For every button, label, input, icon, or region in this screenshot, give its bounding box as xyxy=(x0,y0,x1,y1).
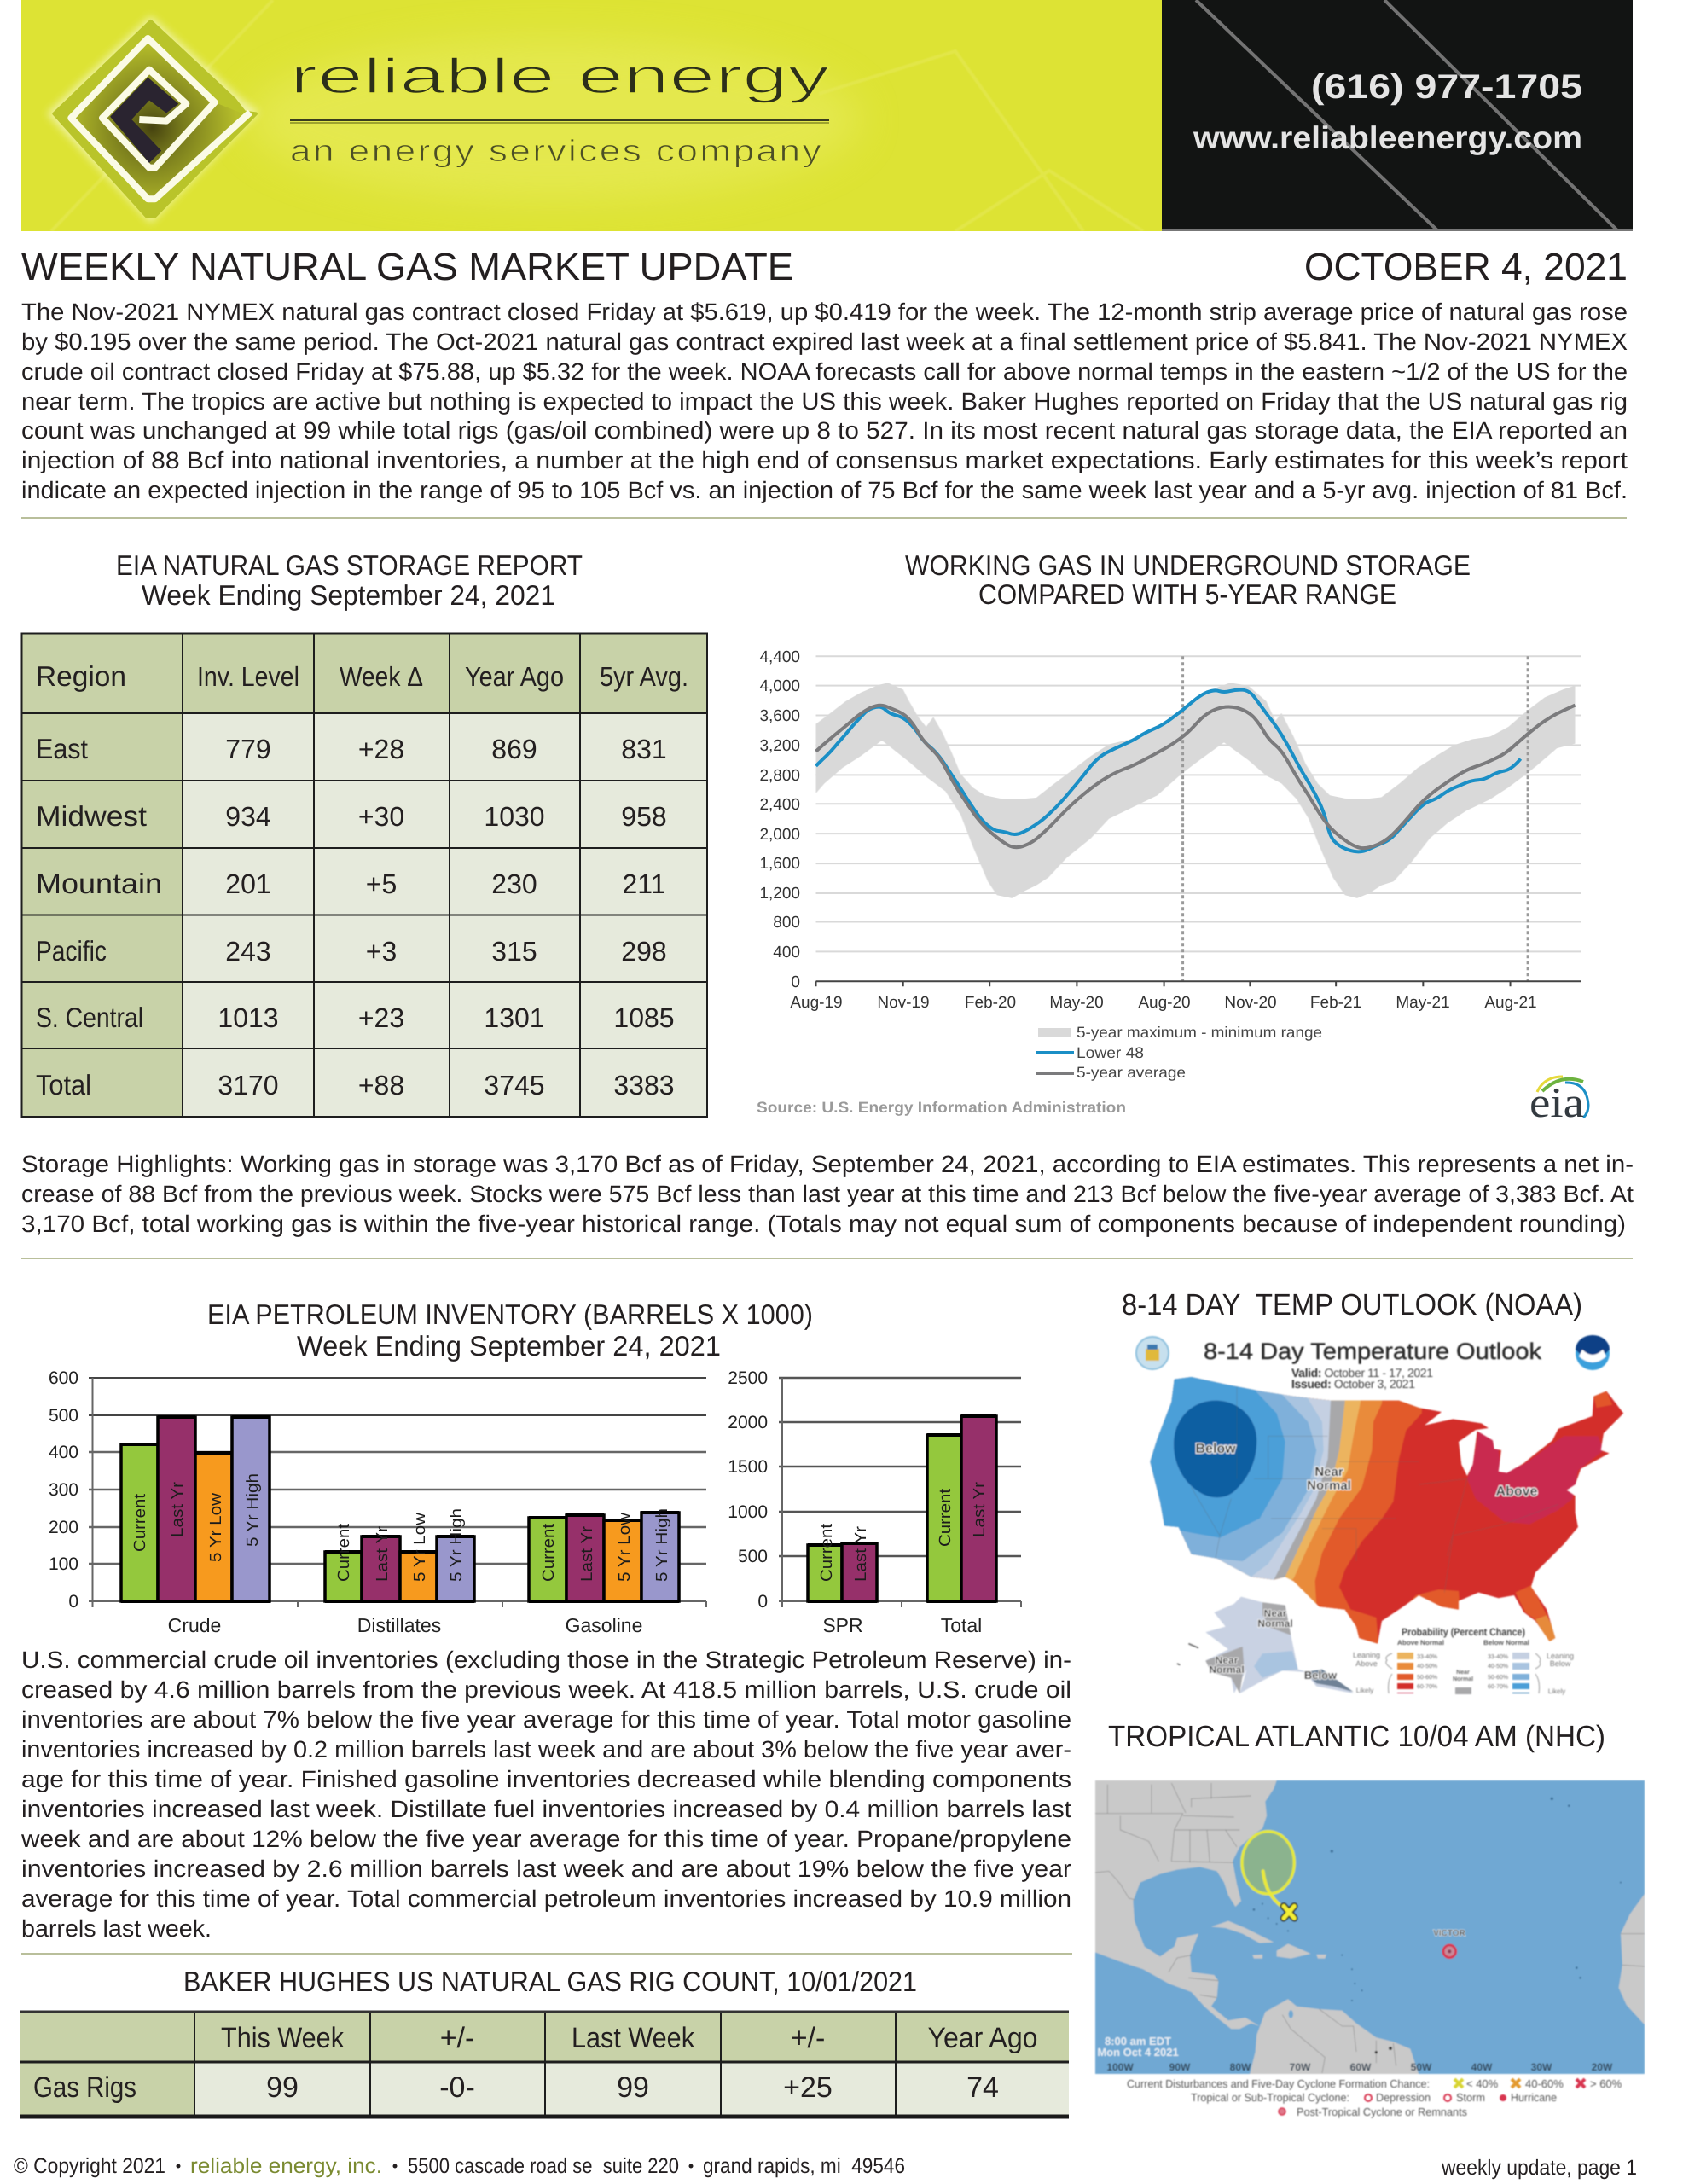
y axis labels: 2000 xyxy=(728,1413,768,1432)
chart legend: 5-year average xyxy=(1077,1064,1186,1081)
row: East: 869 xyxy=(491,734,537,764)
footer: copyright and address: reliable energy, inc. xyxy=(190,2154,382,2178)
heading: working gas chart: WORKING GAS IN UNDERGROUND STORAGE xyxy=(905,549,1471,581)
bars: total: Last Yr xyxy=(971,1481,989,1537)
bars: total: Current xyxy=(937,1488,955,1547)
row: Pacific xyxy=(36,935,667,967)
timestamp: 8:00 am EDT xyxy=(1105,2035,1171,2048)
map legend: Above xyxy=(1355,1659,1378,1668)
y axis labels: 0 xyxy=(757,1592,768,1612)
map legend: 60-70% xyxy=(1488,1684,1508,1690)
map legend xyxy=(1127,2077,1622,2118)
x axis labels xyxy=(790,994,1537,1012)
bars: gasoline: Last Yr xyxy=(578,1525,596,1582)
row: S. Central: 1013 xyxy=(218,1002,279,1033)
y axis labels: 600 xyxy=(49,1368,78,1388)
timestamp xyxy=(1097,2035,1179,2059)
map legend: 33-40% xyxy=(1488,1654,1508,1660)
y axis labels: 500 xyxy=(738,1547,768,1566)
alaska xyxy=(1205,1597,1354,1693)
row: S. Central xyxy=(36,1002,675,1033)
footer: copyright and address: © Copyright 2021 xyxy=(14,2154,165,2178)
text block: market summary xyxy=(21,299,1628,503)
text block: market summary: by $0.195 over the same period. The Oct-2021 natural gas contract expired last week at a final settlement price of $5.841. The Nov-2021 NYMEX xyxy=(21,328,1628,355)
category labels: Distillates xyxy=(357,1614,441,1636)
x axis labels: Feb-20 xyxy=(965,994,1016,1012)
map: NOAA 8-14 day temperature outlook xyxy=(1135,1334,1624,1696)
tagline: an energy services company xyxy=(290,133,823,168)
y axis labels xyxy=(728,1368,768,1612)
bars: SPR: Last Yr xyxy=(852,1525,870,1582)
y axis labels: 3,200 xyxy=(759,737,800,755)
text block: petroleum commentary: inventories are about 7% below the five year average for this time of year. Total motor gasoline xyxy=(21,1706,1071,1733)
icon: commerce seal xyxy=(1136,1337,1169,1369)
map legend: Below Normal xyxy=(1483,1639,1529,1647)
text block: market summary: count was unchanged at 99 while total rigs (gas/oil combined) were up 8 to 527. In its most recent natural gas storage data, the EIA reported an xyxy=(21,417,1628,444)
text block: petroleum commentary: creased by 4.6 million barrels from the previous week. At 418.5 million barrels, U.S. crude oil xyxy=(21,1676,1071,1703)
y axis labels: 400 xyxy=(49,1443,78,1462)
y axis labels xyxy=(49,1368,78,1612)
category labels xyxy=(822,1614,982,1636)
map region labels: Normal xyxy=(1307,1478,1351,1493)
category labels: Total xyxy=(941,1614,982,1636)
map legend: 50-60% xyxy=(1417,1675,1437,1681)
line chart: working gas in underground storage xyxy=(757,648,1588,1126)
row: Midwest: 1030 xyxy=(484,801,545,832)
y axis labels: 500 xyxy=(49,1406,78,1426)
y axis labels: 3,600 xyxy=(759,707,800,725)
chart legend xyxy=(1036,1024,1322,1081)
heading: tropical atlantic: TROPICAL ATLANTIC 10/04 AM (NHC) xyxy=(1108,1720,1605,1753)
map region labels: Above xyxy=(1496,1484,1538,1499)
row: Pacific: Pacific xyxy=(36,935,107,967)
disturbance formation area xyxy=(1242,1832,1294,1894)
longitude labels: 50W xyxy=(1411,2061,1432,2073)
y axis labels: 1,200 xyxy=(759,885,800,903)
chart legend: Lower 48 xyxy=(1077,1044,1144,1061)
row: Total xyxy=(36,1069,675,1101)
map legend: 40-60% xyxy=(1525,2077,1564,2090)
map legend: Storm xyxy=(1456,2091,1485,2104)
row: East: 779 xyxy=(225,734,271,764)
map legend: Tropical or Sub-Tropical Cyclone: xyxy=(1191,2091,1349,2104)
rig table data row: +25 xyxy=(783,2071,833,2104)
map shapes xyxy=(1095,1780,1645,2075)
arrow: disturbance track xyxy=(1263,1871,1282,1907)
row: S. Central: S. Central xyxy=(36,1002,143,1033)
longitude labels: 100W xyxy=(1106,2061,1134,2073)
chart legend: 5-year maximum - minimum range xyxy=(1077,1024,1322,1041)
row: Midwest: 958 xyxy=(621,801,667,832)
panel: yellow logo band xyxy=(21,0,1162,231)
row: Pacific: 315 xyxy=(491,936,537,967)
rig table data row: -0- xyxy=(439,2071,475,2104)
rig table header row: Last Week xyxy=(572,2022,695,2054)
row: Mountain: 211 xyxy=(622,868,666,899)
text block: market summary: The Nov-2021 NYMEX natural gas contract closed Friday at $5.619, up $0.419 for the week. The 12-month strip average price of natural gas rose xyxy=(21,299,1628,325)
map title: 8-14 Day Temperature Outlook xyxy=(1204,1339,1542,1364)
footer: copyright and address xyxy=(14,2154,905,2178)
x axis labels: Feb-21 xyxy=(1310,994,1361,1012)
rig table header row: This Week xyxy=(221,2022,345,2054)
bars: SPR xyxy=(808,1523,877,1601)
map legend: Probability (Percent Chance) xyxy=(1402,1626,1525,1638)
y axis labels: 0 xyxy=(68,1592,78,1612)
text block: petroleum commentary: average for this time of year. Total commercial petroleum inventories increased by 10.9 million xyxy=(21,1885,1071,1912)
table header row: 5yr Avg. xyxy=(600,661,688,692)
bar chart: crude, distillates, gasoline xyxy=(49,1368,706,1636)
row: Total: 3170 xyxy=(218,1070,279,1101)
header banner xyxy=(21,0,1633,231)
map region labels xyxy=(1195,1442,1538,1682)
map legend: 50-60% xyxy=(1488,1675,1508,1681)
bars: gasoline xyxy=(529,1508,679,1601)
row: Midwest xyxy=(36,800,667,832)
y axis labels xyxy=(759,648,800,991)
x axis labels: Aug-21 xyxy=(1484,994,1537,1012)
map legend: 60-70% xyxy=(1417,1684,1437,1690)
text block: petroleum commentary: age for this time of year. Finished gasoline inventories decreased while blending components xyxy=(21,1766,1071,1792)
map legend xyxy=(1353,1626,1574,1695)
text block: petroleum commentary: inventories increased by 0.2 million barrels last week and are about 3% below the five year aver- xyxy=(21,1736,1071,1763)
heading: petroleum inventory xyxy=(207,1298,813,1362)
row: Mountain: 201 xyxy=(225,868,271,899)
rig table data row: 74 xyxy=(966,2071,999,2104)
y axis labels: 4,000 xyxy=(759,677,800,695)
bars: distillates: Current xyxy=(335,1523,353,1582)
map legend: Leaning xyxy=(1547,1652,1574,1660)
map legend: Likely xyxy=(1356,1687,1373,1694)
map legend: Likely xyxy=(1548,1687,1565,1695)
bars: gasoline: 5 Yr Low xyxy=(616,1513,634,1582)
heading: rig count: BAKER HUGHES US NATURAL GAS RIG COUNT, 10/01/2021 xyxy=(183,1966,917,1997)
chart plot lines xyxy=(816,656,1581,986)
map: NHC tropical atlantic outlook xyxy=(1095,1780,1645,2118)
row: Mountain xyxy=(36,868,666,899)
row: Pacific: 298 xyxy=(621,936,667,967)
heading: petroleum inventory: Week Ending September 24, 2021 xyxy=(297,1330,721,1362)
text block: petroleum commentary: U.S. commercial crude oil inventories (excluding those in the Strategic Petroleum Reserve) in- xyxy=(21,1647,1071,1673)
row: East: East xyxy=(36,733,88,764)
title: WEEKLY NATURAL GAS MARKET UPDATE xyxy=(21,245,793,288)
row: East: 831 xyxy=(621,734,667,764)
x axis labels: Nov-20 xyxy=(1224,994,1277,1012)
rig table header row: +/- xyxy=(440,2022,474,2054)
valid and issued dates: Valid: October 11 - 17, 2021 xyxy=(1291,1366,1433,1380)
footer: page number: weekly update, page 1 xyxy=(1441,2156,1637,2180)
valid and issued dates: Issued: October 3, 2021 xyxy=(1291,1377,1415,1391)
x axis labels: Nov-19 xyxy=(877,994,930,1012)
icon: reliable energy spiral logo xyxy=(47,15,258,224)
row: Pacific: +3 xyxy=(366,936,397,967)
date: OCTOBER 4, 2021 xyxy=(1304,245,1628,288)
map legend: Below xyxy=(1550,1659,1571,1668)
longitude labels: 60W xyxy=(1350,2061,1372,2073)
map legend: Leaning xyxy=(1353,1651,1380,1659)
bars: SPR: Current xyxy=(818,1523,836,1582)
map region labels: Below xyxy=(1195,1442,1236,1456)
bar chart: SPR and total xyxy=(728,1368,1021,1636)
row: Total: 3745 xyxy=(484,1070,545,1101)
rig table data row: 99 xyxy=(617,2071,649,2104)
text block: petroleum commentary: inventories increased by 2.6 million barrels last week and are about 19% below the five year xyxy=(21,1856,1071,1882)
bars: distillates: 5 Yr Low xyxy=(411,1513,429,1582)
map legend: 40-50% xyxy=(1417,1664,1437,1670)
bars: gasoline: 5 Yr High xyxy=(653,1508,671,1582)
bars: crude: Current xyxy=(131,1493,149,1552)
longitude labels: 80W xyxy=(1230,2061,1251,2073)
land masses xyxy=(1095,1780,1645,2075)
y axis labels: 2500 xyxy=(728,1368,768,1388)
heading: storage report: Week Ending September 24, 2021 xyxy=(142,579,555,611)
map region labels: Below xyxy=(1304,1669,1338,1682)
row: Midwest: 934 xyxy=(225,801,271,832)
longitude labels: 20W xyxy=(1592,2061,1613,2073)
longitude labels: 30W xyxy=(1531,2061,1552,2073)
table header row: Inv. Level xyxy=(197,661,299,692)
map region labels: Near xyxy=(1216,1654,1239,1666)
row: Mountain: 230 xyxy=(491,868,537,899)
y axis labels: 200 xyxy=(49,1518,78,1537)
text block: storage highlights: Storage Highlights: Working gas in storage was 3,170 Bcf as of Friday, September 24, 2021, according to EIA estimates. This represents a net in- xyxy=(21,1151,1634,1177)
y axis labels: 1500 xyxy=(728,1457,768,1477)
map region labels: Normal xyxy=(1209,1664,1245,1676)
rig table header row: Year Ago xyxy=(928,2022,1037,2054)
map region labels: Normal xyxy=(1257,1618,1293,1629)
map legend: Above Normal xyxy=(1397,1639,1444,1647)
map legend: 40-50% xyxy=(1488,1664,1508,1670)
contiguous US temperature bands xyxy=(1150,1376,1624,1645)
rig table data row xyxy=(33,2071,999,2104)
row: Total: +88 xyxy=(358,1070,404,1101)
bars: crude: Last Yr xyxy=(169,1481,187,1537)
table: gas rig count xyxy=(20,2012,1069,2118)
heading: working gas chart xyxy=(905,549,1471,610)
table header row xyxy=(36,660,688,692)
storm label: VICTOR xyxy=(1433,1929,1466,1938)
map legend: Normal xyxy=(1453,1676,1473,1682)
footer: copyright and address: 5500 cascade road se suite 220 xyxy=(408,2154,679,2178)
icon: noaa logo xyxy=(1576,1335,1610,1370)
row: S. Central: 1301 xyxy=(484,1002,545,1033)
category labels xyxy=(168,1614,642,1636)
y axis labels: 100 xyxy=(49,1554,78,1574)
phone number: (616) 977-1705 xyxy=(1311,68,1582,106)
y axis labels: 2,400 xyxy=(759,796,800,814)
row: Mountain: Mountain xyxy=(36,868,162,899)
bars: crude: 5 Yr High xyxy=(244,1473,262,1547)
bars: crude xyxy=(121,1417,270,1601)
islands xyxy=(1253,1798,1622,2053)
timestamp: Mon Oct 4 2021 xyxy=(1097,2046,1179,2059)
decorative logo rule xyxy=(290,119,829,124)
bars: distillates: 5 Yr High xyxy=(448,1508,466,1582)
map legend: 33-40% xyxy=(1417,1654,1437,1660)
bars: gasoline: Current xyxy=(540,1523,558,1582)
heading: petroleum inventory: EIA PETROLEUM INVENTORY (BARRELS X 1000) xyxy=(207,1298,813,1330)
text block: market summary: indicate an expected injection in the range of 95 to 105 Bcf vs. an injection of 75 Bcf for the same week last year and a 5-yr avg. injection of 81 Bcf. xyxy=(21,477,1628,503)
heading: storage report xyxy=(116,549,583,611)
bars: total xyxy=(927,1416,996,1601)
map legend: Post-Tropical Cyclone or Remnants xyxy=(1297,2106,1467,2118)
rig table header row xyxy=(221,2022,1037,2054)
text block: market summary: crude oil contract closed Friday at $75.88, up $5.32 for the week. NOAA forecasts call for above normal temps in the eastern ~1/2 of the US for the xyxy=(21,358,1628,385)
map legend: Depression xyxy=(1376,2091,1431,2104)
x axis labels: Aug-20 xyxy=(1138,994,1191,1012)
text block: petroleum commentary: inventories increased last week. Distillate fuel inventories increased by 0.4 million barrels last xyxy=(21,1796,1071,1822)
text block: petroleum commentary: week and are about 12% below the five year average for this time of year. Propane/propylene xyxy=(20,1826,1071,1852)
text block: petroleum commentary: barrels last week. xyxy=(21,1915,212,1942)
map shapes xyxy=(1150,1376,1624,1694)
icon: Victor storm marker xyxy=(1443,1945,1456,1958)
heading: working gas chart: COMPARED WITH 5-YEAR RANGE xyxy=(978,578,1396,610)
row: S. Central: +23 xyxy=(358,1002,404,1033)
text block: storage highlights: 3,170 Bcf, total working gas is within the five-year historical range. (Totals may not equal sum of components because of independent rounding) xyxy=(21,1211,1626,1237)
table header row: Region xyxy=(36,660,126,692)
x axis labels: May-21 xyxy=(1396,994,1450,1012)
category labels: Gasoline xyxy=(566,1614,642,1636)
x axis labels: May-20 xyxy=(1049,994,1104,1012)
table header row: Year Ago xyxy=(465,661,564,692)
table: natural gas storage xyxy=(21,633,707,1117)
y axis labels: 400 xyxy=(773,944,800,961)
table header row: Week Δ xyxy=(340,661,423,692)
map region labels: Near xyxy=(1264,1607,1287,1619)
rig table data row: Gas Rigs xyxy=(33,2071,136,2104)
longitude labels xyxy=(1106,2061,1613,2073)
y axis labels: 800 xyxy=(773,914,800,932)
longitude labels: 40W xyxy=(1471,2061,1493,2073)
rig table header row: +/- xyxy=(791,2022,825,2054)
y axis labels: 300 xyxy=(49,1480,78,1500)
text block: market summary: near term. The tropics are active but nothing is expected to impact the US this week. Baker Hughes reported on Friday that the US natural gas rig xyxy=(21,388,1628,415)
valid and issued dates xyxy=(1291,1366,1433,1391)
row: Pacific: 243 xyxy=(225,936,271,967)
longitude labels: 70W xyxy=(1290,2061,1311,2073)
row: Mountain: +5 xyxy=(366,868,397,899)
footer: copyright and address: grand rapids, mi 49546 xyxy=(703,2154,905,2178)
website: www.reliableenergy.com xyxy=(1193,120,1582,155)
map region labels: Near xyxy=(1314,1465,1343,1479)
bars: crude: 5 Yr Low xyxy=(207,1493,225,1562)
bars: distillates xyxy=(325,1508,474,1601)
category labels: SPR xyxy=(822,1614,863,1636)
y axis labels: 2,000 xyxy=(759,826,800,844)
y axis labels: 1000 xyxy=(728,1502,768,1522)
y axis labels: 4,400 xyxy=(759,648,800,666)
row: S. Central: 1085 xyxy=(613,1002,675,1033)
map legend: Current Disturbances and Five-Day Cyclone Formation Chance: xyxy=(1127,2077,1430,2090)
text block: storage highlights xyxy=(21,1151,1634,1237)
panel: black contact band xyxy=(1162,0,1633,231)
row: Total: 3383 xyxy=(613,1070,675,1101)
map legend: > 60% xyxy=(1590,2077,1622,2090)
icon: disturbance marker xyxy=(1284,1906,1294,1918)
map legend: < 40% xyxy=(1466,2077,1499,2090)
row: Midwest: +30 xyxy=(358,801,404,832)
x axis labels: Aug-19 xyxy=(790,994,843,1012)
y axis labels: 2,800 xyxy=(759,767,800,785)
row: Midwest: Midwest xyxy=(36,800,147,832)
row: Total: Total xyxy=(36,1069,91,1101)
text block: storage highlights: crease of 88 Bcf from the previous week. Stocks were 575 Bcf less than last year at this time and 213 Bcf below the five-year average of 3,383 Bcf. At xyxy=(21,1181,1634,1207)
longitude labels: 90W xyxy=(1169,2061,1191,2073)
y axis labels: 0 xyxy=(791,973,800,991)
icon: eia logo: eia xyxy=(1529,1078,1584,1126)
heading: storage report: EIA NATURAL GAS STORAGE REPORT xyxy=(116,549,583,581)
y axis labels: 1,600 xyxy=(759,855,800,873)
text block: market summary: injection of 88 Bcf into national inventories, a number at the high end of consensus market expectations. Early estimates for this week’s report xyxy=(21,447,1628,473)
category labels: Crude xyxy=(168,1614,221,1636)
row: East: +28 xyxy=(358,734,404,764)
bars: distillates: Last Yr xyxy=(374,1525,392,1582)
map legend: Hurricane xyxy=(1511,2091,1557,2104)
source note: Source: U.S. Energy Information Administration xyxy=(757,1099,1126,1116)
map legend: Near xyxy=(1456,1670,1470,1676)
rig table data row: 99 xyxy=(266,2071,299,2104)
heading: temperature outlook: 8-14 DAY TEMP OUTLOOK (NOAA) xyxy=(1122,1288,1582,1321)
row: East xyxy=(36,733,667,764)
company name: reliable energy xyxy=(290,49,829,104)
text block: petroleum commentary xyxy=(20,1647,1071,1942)
